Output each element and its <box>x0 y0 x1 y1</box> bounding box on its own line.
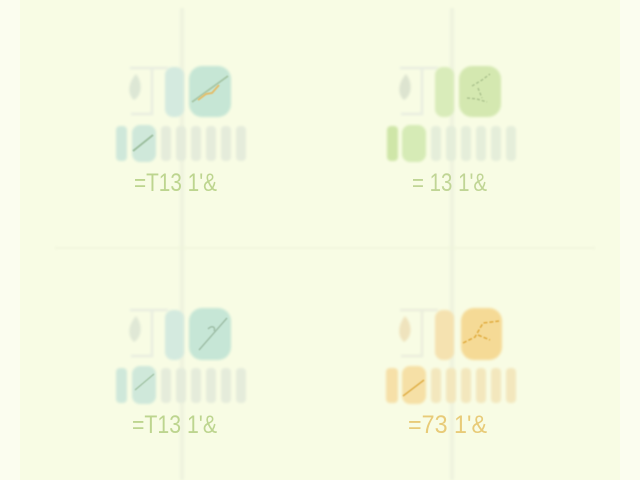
icon: bar sketch <box>403 380 424 396</box>
icon: faint leaf frame <box>129 68 168 114</box>
value label: =T13 1'& <box>134 169 217 197</box>
icon tile with sketch <box>461 308 502 360</box>
panel: bottom left unit <box>116 308 246 439</box>
icon: faint leaf frame <box>399 310 438 356</box>
value label: = 13 1'& <box>412 169 487 197</box>
icon: faint leaf frame <box>399 68 438 114</box>
bar strip <box>386 366 516 404</box>
bar strip <box>116 125 246 162</box>
icon: bar sketch <box>133 135 153 151</box>
tall tile <box>165 67 184 117</box>
tall tile <box>435 67 454 117</box>
bar strip <box>387 125 516 162</box>
panel: bottom right unit <box>386 308 516 439</box>
value label: =T13 1'& <box>132 411 217 439</box>
bar strip <box>116 366 246 404</box>
icon: faint leaf frame <box>129 310 168 356</box>
icon tile with sketch <box>459 66 501 117</box>
value label: =73 1'& <box>408 411 487 439</box>
tall tile <box>165 310 184 360</box>
tall tile <box>435 310 454 360</box>
panel: top right unit <box>387 66 516 197</box>
panel: top left unit <box>116 66 246 197</box>
icon tile with sketch <box>189 308 231 360</box>
icon: bar sketch <box>135 374 154 390</box>
icon tile with sketch <box>189 66 231 117</box>
